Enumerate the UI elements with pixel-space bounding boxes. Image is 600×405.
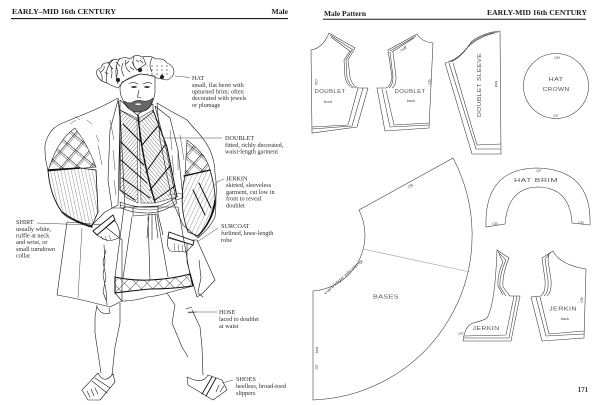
collar xyxy=(120,100,153,122)
label: shirt: small turndown xyxy=(16,246,56,253)
pattern: doublet front xyxy=(311,33,368,133)
left page header xyxy=(11,7,289,19)
page number: 171 xyxy=(578,387,589,394)
fur scribbles xyxy=(103,245,107,305)
label: doublet: fitted, richly decorated, xyxy=(225,142,284,149)
pattern: hat brim: HAT BRIM xyxy=(514,178,558,184)
label: jerkin: doublet xyxy=(226,202,245,209)
pattern: doublet back: DOUBLET xyxy=(394,89,426,95)
pattern: doublet front: DOUBLET xyxy=(314,89,346,95)
pattern: doublet back: back xyxy=(407,98,415,103)
label: hat: upturned brim; often xyxy=(192,88,245,96)
left sleeve lower xyxy=(48,168,98,226)
pattern: bases: BASES xyxy=(373,294,399,300)
pattern: doublet sleeve xyxy=(445,31,501,154)
pattern: hat brim: CB xyxy=(578,220,584,225)
pattern: jerkin front: JERKIN xyxy=(472,326,500,332)
pattern: hat brim: CF xyxy=(536,168,542,173)
pattern: hat crown: CF xyxy=(553,113,559,118)
right page header xyxy=(323,8,588,19)
label: hat: decorated with jewels xyxy=(192,95,247,102)
label: shirt: usually white, xyxy=(16,226,52,233)
right page header: EARLY-MID 16th CENTURY xyxy=(487,8,588,17)
pattern: hat brim: CB xyxy=(492,221,498,226)
coat body xyxy=(57,222,122,307)
costume figure illustration xyxy=(45,55,227,400)
pattern: doublet front: front xyxy=(324,99,333,104)
pattern: jerkin back: CB xyxy=(579,297,584,303)
shoes xyxy=(82,373,115,400)
label: jerkin: garment, cut low in xyxy=(226,189,275,196)
pattern: jerkin front: CF xyxy=(458,331,464,336)
label: jerkin: front to reveal xyxy=(226,196,262,203)
pattern: hat crown: CROWN xyxy=(542,87,570,93)
legs xyxy=(95,303,120,375)
label: surcoat: furlined, knee-length xyxy=(221,230,274,237)
label: doublet: DOUBLET xyxy=(225,135,254,142)
pattern: hat crown: CB xyxy=(554,55,560,60)
pattern: doublet sleeve: DOUBLET SLEEVE xyxy=(477,53,483,117)
eyes xyxy=(130,86,150,88)
doublet xyxy=(120,110,138,203)
label: doublet: waist-length garment xyxy=(225,148,278,156)
label: hat: HAT xyxy=(192,75,204,82)
right page header: Male Pattern xyxy=(324,9,367,18)
label: jerkin: JERKIN xyxy=(226,176,248,182)
pattern: jerkin back: JERKIN xyxy=(549,306,577,312)
label: shoes: slippers xyxy=(236,390,256,397)
left page header: Male xyxy=(272,7,289,16)
label: jerkin: skirted, sleeveless xyxy=(226,182,272,189)
label: shoes: SHOES xyxy=(236,376,256,383)
leader lines xyxy=(37,76,233,383)
pattern: hat brim xyxy=(486,168,590,227)
pattern: doublet front: CB xyxy=(314,79,319,85)
fur lapels xyxy=(108,100,125,208)
label: surcoat: robe xyxy=(221,237,232,244)
pattern: bases: cartridge pleating xyxy=(323,258,363,295)
label: hose: laced to doublet xyxy=(219,316,259,323)
pattern: jerkin front xyxy=(458,250,520,341)
right sleeve lattice xyxy=(185,140,210,176)
label: shirt: SHIRT xyxy=(16,219,34,226)
pattern: doublet back: CB xyxy=(427,79,432,85)
label: surcoat: SURCOAT xyxy=(221,223,250,230)
label: hose: at waist xyxy=(219,323,239,330)
pattern: bases: CF xyxy=(314,364,319,370)
pattern: doublet sleeve: fold xyxy=(494,81,499,87)
left sleeve lattice xyxy=(48,128,96,171)
left page header: EARLY–MID 16th CENTURY xyxy=(12,7,117,16)
cuffs and hands xyxy=(93,215,115,235)
pattern: jerkin back: back xyxy=(561,316,569,321)
label: shoes: heelless, broad-toed xyxy=(236,383,287,390)
pattern: bases xyxy=(313,158,472,400)
label: shirt: collar xyxy=(16,253,31,260)
label: hose: HOSE xyxy=(219,309,236,316)
hat xyxy=(96,55,174,88)
label: shirt: ruffle at neck xyxy=(16,232,50,240)
left sleeve xyxy=(45,98,120,227)
face xyxy=(120,74,155,112)
skirt trim band xyxy=(115,274,193,293)
right sleeve lower xyxy=(182,170,215,236)
label: hat: or plumage xyxy=(192,102,221,109)
beard xyxy=(124,98,153,112)
belt and tassel xyxy=(120,198,177,213)
pattern: hat crown xyxy=(524,54,588,118)
pattern: doublet back xyxy=(377,34,433,131)
pattern: hat crown: HAT xyxy=(548,77,564,83)
pattern: bases: CB xyxy=(407,182,414,189)
label: hat: small, flat beret with xyxy=(192,82,245,89)
right sleeve xyxy=(157,103,216,238)
pattern: bases: fold xyxy=(314,347,319,353)
pattern: doublet back: cuff xyxy=(399,45,408,52)
label: shirt: and wrist, or xyxy=(16,239,48,246)
skirt xyxy=(115,207,193,301)
pattern: jerkin back xyxy=(531,251,586,341)
